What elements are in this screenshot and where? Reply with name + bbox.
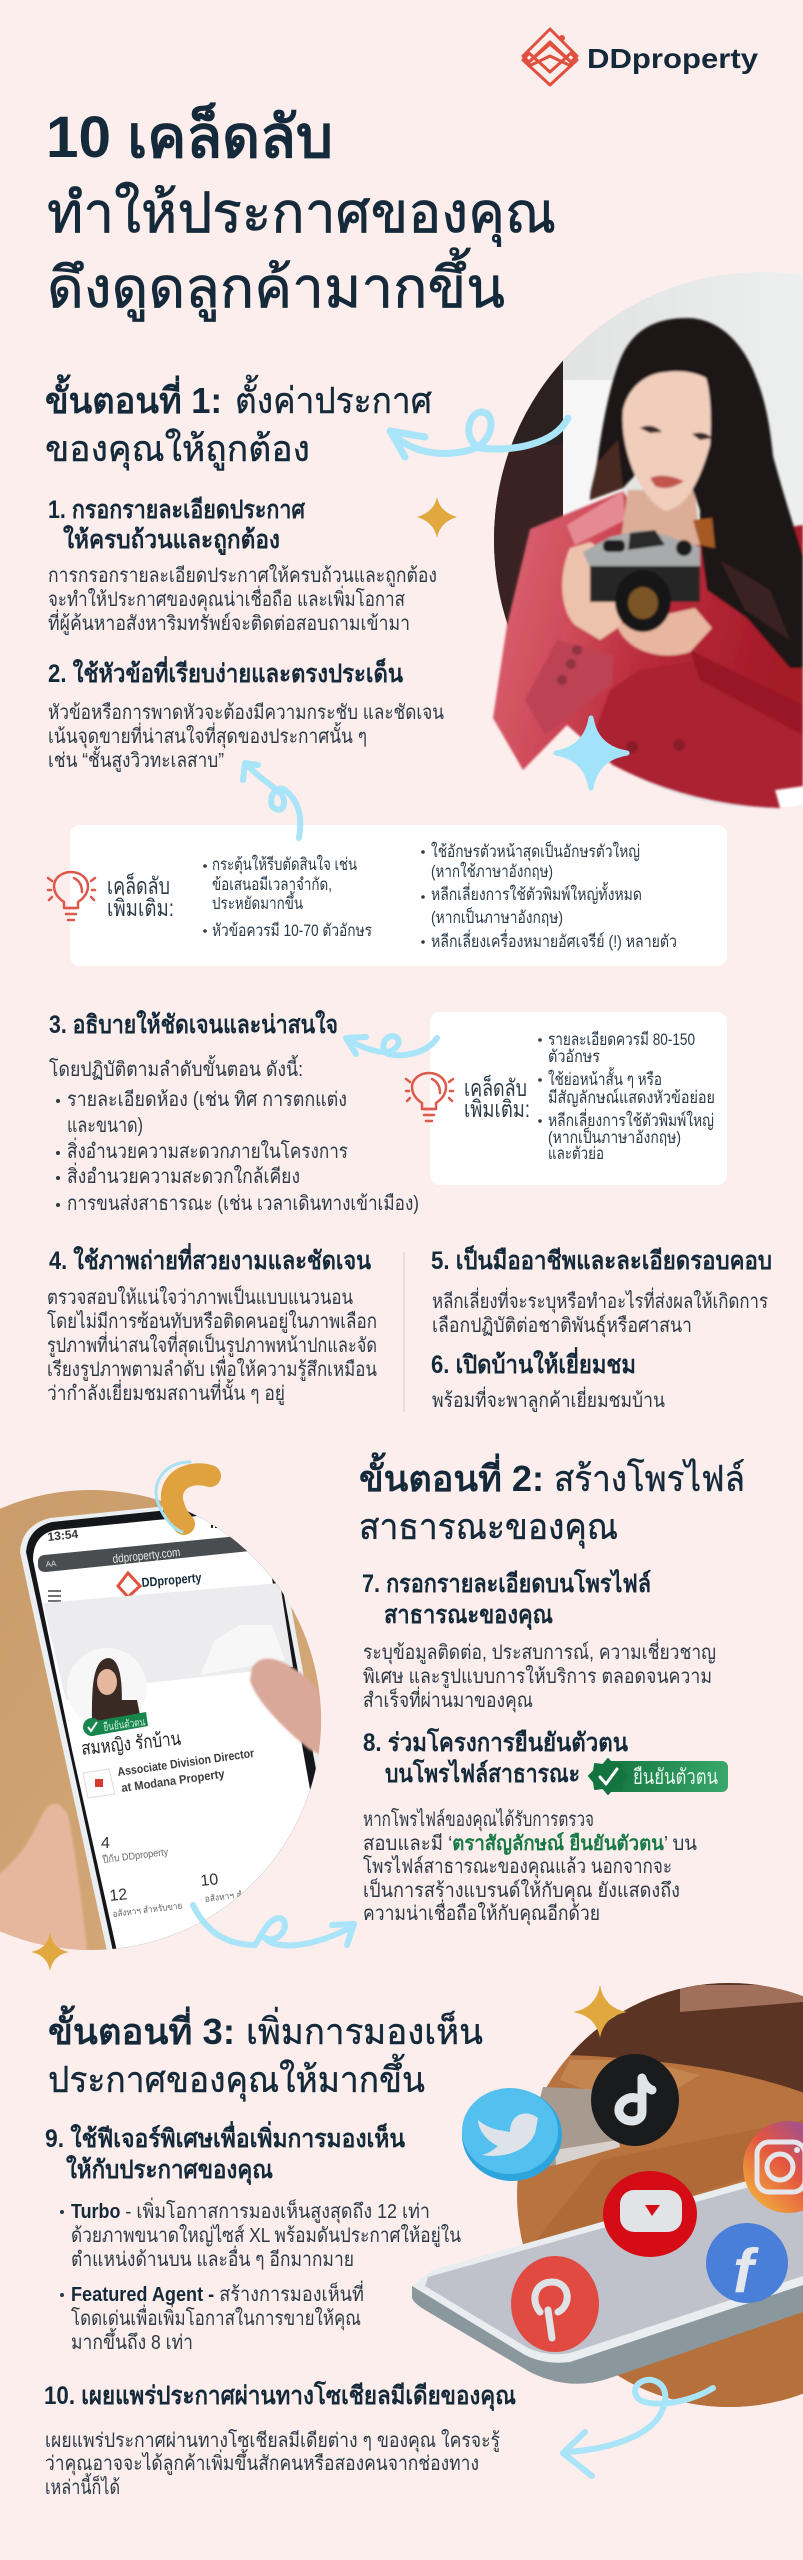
image: phone showing public profile: DDproperty (141, 1570, 203, 1590)
step 1 heading: ของคุณให้ถูกต้อง (45, 428, 310, 471)
tip 2: เน้นจุดขายที่น่าสนใจที่สุดของประกาศนั้น ๆ (48, 722, 367, 749)
tip 4: รูปภาพที่น่าสนใจที่สุดเป็นรูปภาพหน้าปกและจัด (47, 1331, 377, 1358)
tip 8 (363, 1727, 728, 1926)
arrow: phone to tip 8 (193, 1905, 354, 1945)
tip 10 (44, 2380, 516, 2499)
step 1 heading: ตั้งค่าประกาศ (235, 374, 432, 421)
agent name: สมหญิง รักบ้าน (80, 1729, 182, 1760)
phone body (20, 1506, 318, 1950)
panel: extra tips 2 (406, 1012, 727, 1185)
stats: 4 (101, 1835, 110, 1852)
tip list: ใช้ย่อหน้าสั้น ๆ หรือ (548, 1067, 662, 1089)
star: cyan (556, 718, 627, 788)
step 2 heading: ขั้นตอนที่ 2: (359, 1452, 544, 1499)
tip list: รายละเอียดควรมี 80-150 (548, 1030, 695, 1049)
tip 7: 7. กรอกรายละเอียดบนโพรไฟล์ (362, 1568, 651, 1598)
tip 9: ตำแหน่งด้านบน และอื่น ๆ อีกมากมาย (71, 2245, 354, 2271)
thumb (250, 1659, 325, 1756)
tip 6 (431, 1347, 665, 1413)
status bar: 13:54 (47, 1527, 79, 1544)
tip list: มีสัญลักษณ์แสดงหัวข้อย่อย (548, 1088, 715, 1107)
company box (83, 1769, 115, 1798)
verified badge (90, 1712, 148, 1736)
arrow: social icons to tip 10 (563, 2380, 713, 2476)
tip 2: หัวข้อหรือการพาดหัวจะต้องมีความกระชับ และชัดเจน (48, 702, 444, 724)
panel: extra tips 2: เคล็ดลับ (464, 1073, 527, 1101)
image: phone showing public profile: 12 (109, 1886, 128, 1905)
tip 9: ให้กับประกาศของคุณ (66, 2154, 273, 2186)
step 2 heading: สาธารณะของคุณ (359, 1506, 618, 1549)
tip 3: โดยปฏิบัติตามลำดับขั้นตอน ดังนี้: (49, 1055, 303, 1081)
tip 1: จะทำให้ประกาศของคุณน่าเชื่อถือ และเพิ่มโอกาส (48, 585, 405, 612)
agent title: Associate Division Director (116, 1746, 255, 1779)
title: ทำให้ประกาศของคุณ (47, 181, 556, 247)
title: 10 เคล็ดลับ (46, 102, 333, 170)
logo: DDproperty (523, 29, 758, 85)
icon: facebook (706, 2223, 788, 2306)
tip 9: มากขึ้นถึง 8 เท่า (71, 2328, 193, 2354)
cover image (43, 1583, 293, 1700)
icon: twitter (462, 2088, 562, 2181)
tip 8: เป็นการสร้างแบรนด์ให้กับคุณ ยังแสดงถึง (363, 1877, 680, 1903)
tip 9 (45, 2121, 461, 2354)
step 3 heading: เพิ่มการมองเห็น (246, 2007, 483, 2052)
tip list: column 2: (หากใช้ภาษาอังกฤษ) (431, 861, 553, 881)
tip list: column 1: ข้อเสนอมีเวลาจำกัด, (212, 875, 332, 894)
tip 3: สิ่งอำนวยความสะดวกใกล้เคียง (67, 1162, 300, 1188)
arrow: tip box to tip 3 (346, 1036, 437, 1055)
tip 10: ว่าคุณอาจจะได้ลูกค้าเพิ่มขึ้นสักคนหรือสองคนจากช่องทาง (45, 2449, 479, 2476)
tip list: column 1: กระตุ้นให้รีบตัดสินใจ เช่น (212, 854, 357, 875)
tip 3: 3. อธิบายให้ชัดเจนและน่าสนใจ (49, 1009, 338, 1039)
tip 8: ความน่าเชื่อถือให้กับคุณอีกด้วย (363, 1899, 600, 1926)
logo: DDproperty: DDproperty (587, 43, 758, 74)
tip 5 (431, 1245, 772, 1338)
tip 7: สาธารณะของคุณ (384, 1601, 553, 1631)
tip 3: สิ่งอำนวยความสะดวกภายในโครงการ (67, 1137, 348, 1163)
tip list: ตัวอักษร (548, 1047, 600, 1066)
tip 6: พร้อมที่จะพาลูกค้าเยี่ยมชมบ้าน (432, 1386, 665, 1413)
step 1 heading: ขั้นตอนที่ 1: (45, 374, 222, 421)
tip 8: บนโพรไฟล์สาธารณะ (385, 1758, 580, 1788)
image: phone showing public profile (0, 1490, 321, 1950)
photo: woman with camera (480, 260, 803, 820)
tip list: column 1 (203, 854, 372, 940)
image: phone showing public profile: ยืนยันตัวตน (103, 1715, 146, 1734)
tip 9: Featured Agent - สร้างการมองเห็นที่ (71, 2280, 364, 2306)
tip 4: 4. ใช้ภาพถ่ายที่สวยงามและชัดเจน (49, 1243, 371, 1275)
panel: extra tips 1 (48, 825, 727, 966)
star: gold lower left (31, 1933, 69, 1971)
arrow: tip 2 to extra tips (243, 763, 300, 838)
tip 7: พิเศษ และรูปแบบการให้บริการ ตลอดจนความ (363, 1665, 712, 1689)
laptop behind (520, 2087, 620, 2170)
tip 7: ระบุข้อมูลติดต่อ, ประสบการณ์, ความเชี่ยวชาญ (363, 1638, 716, 1665)
cashew shape decoration (156, 1462, 210, 1532)
tip list: column 2: (หากเป็นภาษาอังกฤษ) (431, 906, 563, 927)
hands (562, 542, 622, 640)
tip 10: เหล่านี้ก็ได้ (45, 2473, 120, 2499)
step 1 heading (45, 374, 432, 471)
title (46, 102, 556, 322)
tip 4: ว่ากำลังเยี่ยมชมสถานที่นั้น ๆ อยู่ (47, 1379, 285, 1406)
tip 1: 1. กรอกรายละเอียดประกาศ (48, 496, 306, 524)
image: social media icons on phone (412, 1980, 803, 2420)
tip 9: ด้วยภาพขนาดใหญ่ไซส์ XL พร้อมดันประกาศให้อยู่ใน (71, 2224, 461, 2248)
hair (590, 318, 803, 668)
tip 7 (362, 1568, 716, 1713)
star: gold (417, 497, 457, 538)
tip 1: ที่ผู้ค้นหาอสังหาริมทรัพย์จะติดต่อสอบถามเข้ามา (48, 609, 410, 636)
neck (620, 490, 700, 545)
panel: extra tips 2: เพิ่มเติม: (464, 1093, 530, 1122)
step 2 heading (359, 1452, 745, 1549)
image: phone showing public profile: ddproperty.com (112, 1545, 181, 1566)
camera (583, 530, 700, 568)
verified badge: ยืนยันตัวตน (633, 1766, 718, 1789)
image: phone showing public profile: AA (45, 1559, 57, 1569)
tip 3 (49, 1009, 419, 1215)
tip 3: รายละเอียดห้อง (เช่น ทิศ การตกแต่ง (67, 1089, 347, 1111)
icon: instagram (743, 2121, 803, 2213)
tip list: column 1: หัวข้อควรมี 10-70 ตัวอักษร (212, 921, 372, 940)
tip 9: 9. ใช้ฟีเจอร์พิเศษเพื่อเพิ่มการมองเห็น (45, 2121, 405, 2153)
tip list: column 2: หลีกเลี่ยงเครื่องหมายอัศเจรีย์ (!) หลายตัว (431, 929, 677, 951)
tip list: และตัวย่อ (548, 1144, 604, 1163)
image: phone showing public profile: 10 (200, 1871, 219, 1890)
tip 1 (48, 496, 437, 636)
panel: extra tips 1: เคล็ดลับ (107, 871, 170, 899)
tip 8: สอบและมี ‘ตราสัญลักษณ์ ยืนยันตัวตน’ บน (363, 1832, 697, 1855)
tip list (538, 1030, 715, 1163)
tip 4 (47, 1243, 377, 1406)
tip 6: 6. เปิดบ้านให้เยี่ยมชม (431, 1347, 636, 1379)
tip 1: ให้ครบถ้วนและถูกต้อง (63, 524, 280, 556)
tip 2: เช่น “ชั้นสูงวิวทะเลสาบ” (48, 746, 224, 773)
tip 2: 2. ใช้หัวข้อที่เรียบง่ายและตรงประเด็น (48, 656, 403, 688)
tip list: column 2: หลีกเลี่ยงการใช้ตัวพิมพ์ใหญ่ทั้งหมด (431, 882, 642, 904)
image: phone showing public profile: อสังหาฯ สำ (204, 1889, 247, 1904)
verified badge (589, 1759, 728, 1794)
tip 5: 5. เป็นมืออาชีพและละเอียดรอบคอบ (431, 1245, 772, 1275)
tip 9: โดดเด่นเพื่อเพิ่มโอกาสในการขายให้คุณ (71, 2304, 361, 2331)
step 2 heading: สร้างโพรไฟล์ (554, 1458, 745, 1499)
icon: tiktok (591, 2054, 679, 2146)
panel: extra tips 1: เพิ่มเติม: (107, 892, 174, 921)
site logo (118, 1573, 140, 1597)
image: phone showing public profile: at Modana Property (120, 1767, 226, 1795)
tip 1: การกรอกรายละเอียดประกาศให้ครบถ้วนและถูกต้อง (48, 564, 437, 588)
tip 3: และขนาด) (67, 1115, 143, 1137)
tip 7: สำเร็จที่ผ่านมาของคุณ (363, 1686, 533, 1713)
left hand (0, 1804, 88, 1960)
arrow: to step 1 heading (390, 412, 568, 457)
icon: light bulb (48, 872, 95, 920)
tip 5: เลือกปฏิบัติต่อชาติพันธุ์หรือศาสนา (432, 1314, 692, 1338)
tip list: หลีกเลี่ยงการใช้ตัวพิมพ์ใหญ่ (548, 1108, 714, 1130)
star: gold top right (573, 1985, 627, 2038)
step 3 heading: ขั้นตอนที่ 3: (48, 2005, 235, 2052)
step 3 heading: ประกาศของคุณให้มากขึ้น (48, 2053, 425, 2102)
tip 4: โดยไม่มีการซ้อนทับหรือติดคนอยู่ในภาพเลือก (47, 1310, 377, 1334)
tip list: column 1: ประหยัดมากขึ้น (212, 891, 303, 913)
icon: youtube (603, 2171, 697, 2257)
face (623, 371, 711, 511)
icon: light bulb (406, 1073, 453, 1121)
tip 9: Turbo - เพิ่มโอกาสการมองเห็นสูงสุดถึง 12 เท่า (71, 2197, 430, 2224)
tip 3: การขนส่งสาธารณะ (เช่น เวลาเดินทางเข้าเมือง) (67, 1193, 419, 1215)
tip list: (หากเป็นภาษาอังกฤษ) (548, 1126, 681, 1147)
url bar (38, 1536, 248, 1572)
avatar (67, 1648, 146, 1699)
tip 4: เรียงรูปภาพตามลำดับ เพื่อให้ความรู้สึกเหมือน (47, 1355, 377, 1382)
icon: pinterest (511, 2256, 599, 2352)
tip 8: โพรไฟล์สาธารณะของคุณแล้ว นอกจากจะ (363, 1855, 672, 1879)
image: phone showing public profile: ปีกับ DDproperty (101, 1846, 169, 1866)
tip 8: หากโพรไฟล์ของคุณได้รับการตรวจ (363, 1808, 594, 1832)
tip list: column 2 (421, 840, 677, 951)
tip 8: 8. ร่วมโครงการยืนยันตัวตน (363, 1727, 628, 1757)
tip 4: ตรวจสอบให้แน่ใจว่าภาพเป็นแบบแนวนอน (47, 1284, 353, 1309)
tip list: column 2: ใช้อักษรตัวหน้าสุดเป็นอักษรตัวใหญ่ (431, 840, 640, 862)
icon: facebook: f (733, 2237, 759, 2306)
phone lying down (412, 2270, 803, 2384)
step 3 heading (48, 2005, 483, 2102)
jacket (493, 491, 803, 808)
title: ดึงดูดลูกค้ามากขึ้น (47, 248, 505, 322)
tip 10: เผยแพร่ประกาศผ่านทางโซเชียลมีเดียต่าง ๆ ของคุณ ใครจะรู้ (45, 2429, 500, 2453)
tip 10: 10. เผยแพร่ประกาศผ่านทางโซเชียลมีเดียของคุณ (44, 2380, 516, 2412)
tip 2 (48, 656, 444, 773)
image: phone showing public profile: อสังหาฯ สำหรับขาย (112, 1901, 183, 1919)
